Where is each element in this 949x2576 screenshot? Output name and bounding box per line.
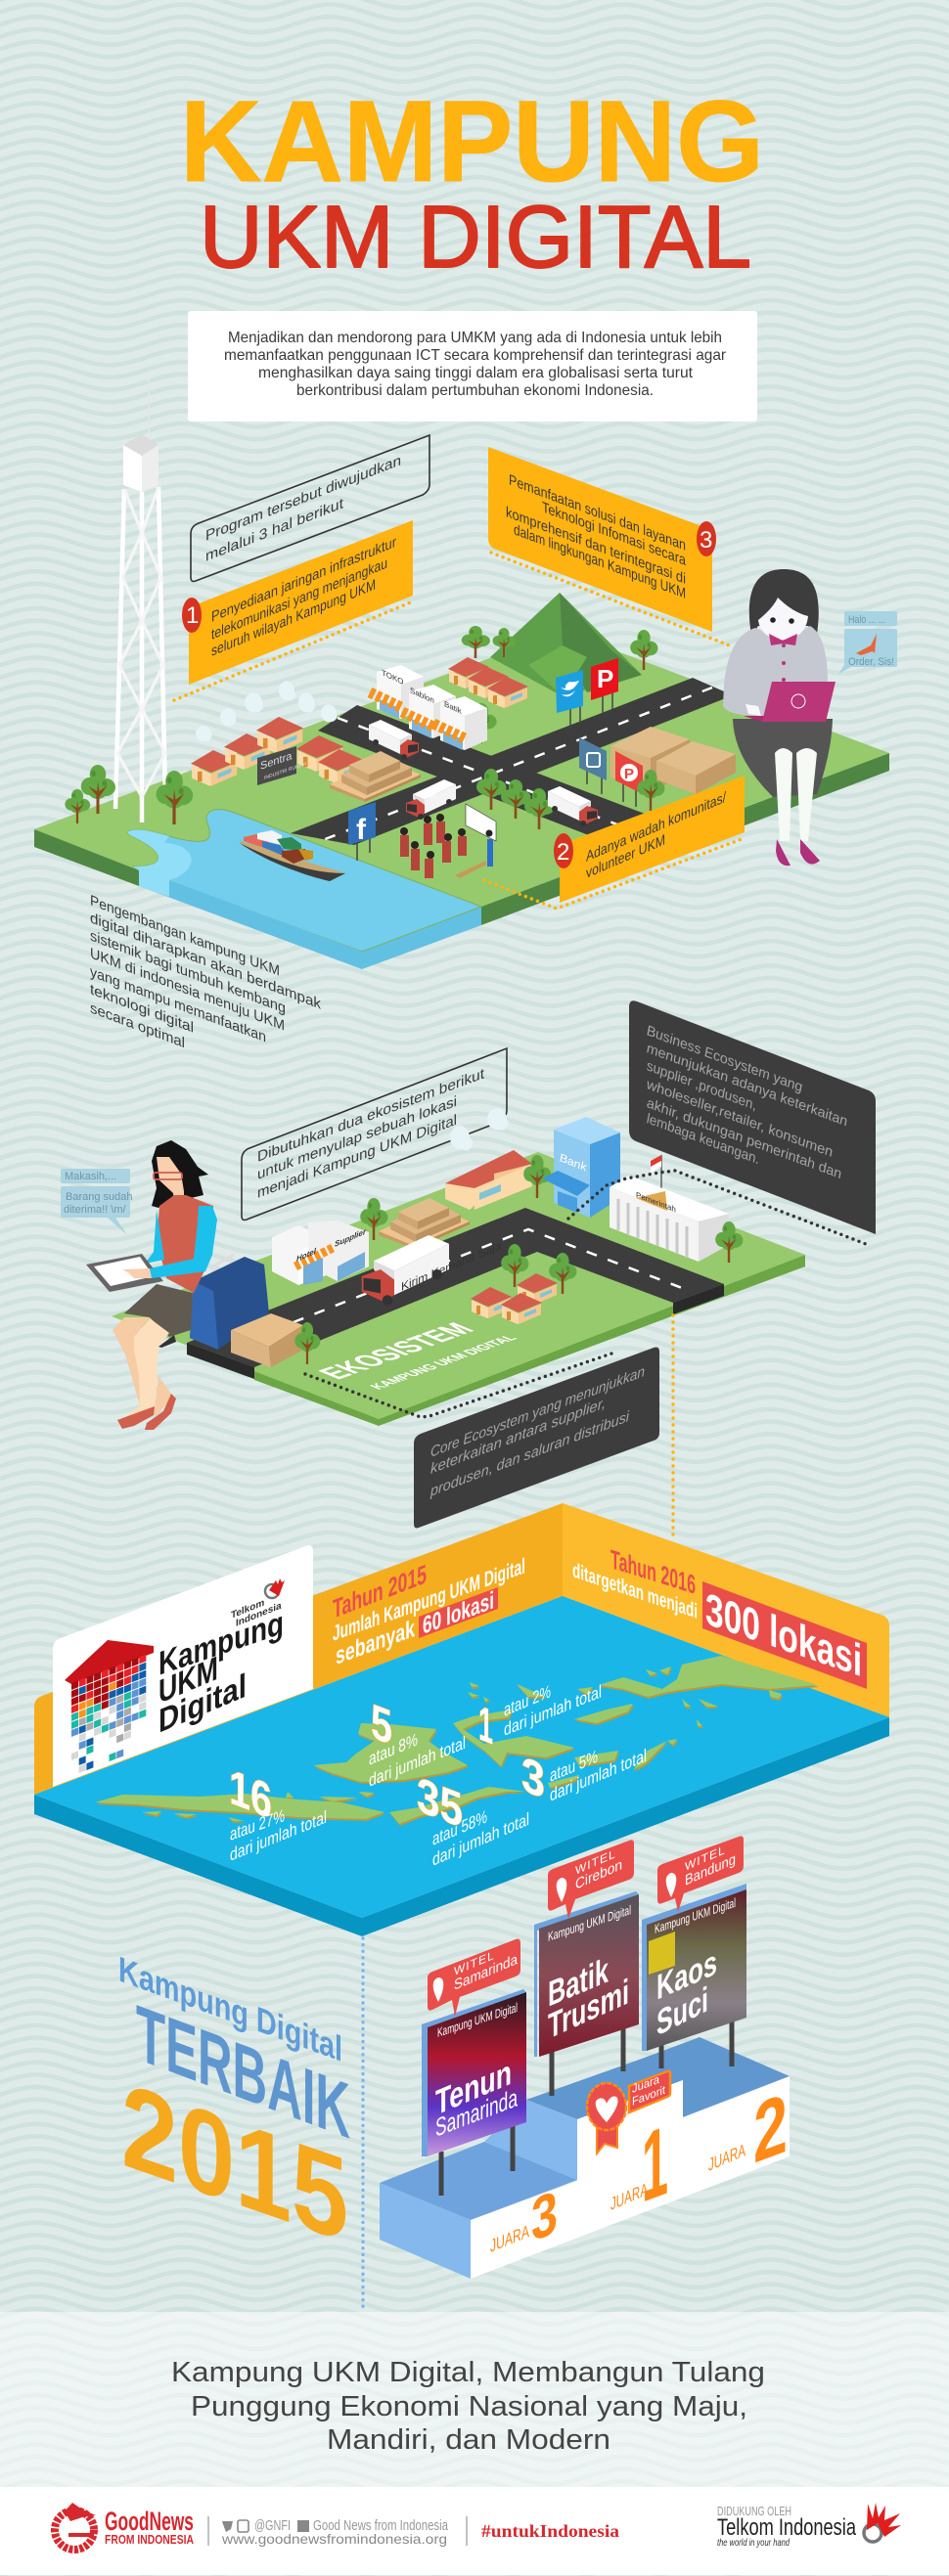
logo card: kampung ukm digital: UKM: [158, 1649, 218, 1711]
water bay: [128, 810, 481, 969]
heading: kampung digital terbaik 2015: [118, 1948, 350, 2268]
social media billboards: f: [356, 814, 367, 846]
outlined note: dibutuhkan: [242, 1048, 507, 1221]
L-shaped road: [187, 1208, 724, 1367]
core ecosystem panel: Core Ecosystem yang menunjukkan: [430, 1363, 645, 1461]
wholesaler and supplier shops: Supplier: [335, 1226, 367, 1249]
billboard: batik trusmi: Batik: [548, 1949, 609, 2015]
2015 statement: sebanyak: [336, 1615, 415, 1670]
2015 statement: Tahun 2015: [333, 1559, 427, 1624]
ecosystem trees and houses: [471, 1244, 576, 1324]
logo card: kampung ukm digital: Kampung: [158, 1604, 284, 1683]
2015 statement: 60 lokasi: [423, 1587, 494, 1640]
juara labels: 2: [753, 2075, 788, 2181]
billboard: tenun samarinda: Samarinda: [435, 2083, 518, 2143]
billboard: kaos suci: Kaos: [656, 1941, 717, 2008]
core ecosystem panel: [414, 1348, 659, 1528]
woman with laptop: [723, 569, 836, 866]
label 2: 2: [557, 839, 569, 866]
paragraph: pengembangan: Pengembangan kampung UKM: [90, 892, 280, 980]
paragraph: pengembangan: digital diharapkan akan berdampak: [90, 910, 321, 1013]
social links: Good News from Indonesia: [313, 2517, 448, 2534]
outlined note: dibutuhkan: untuk menyulap sebuah lokasi: [257, 1093, 457, 1183]
figure 3: 3: [521, 1746, 545, 1809]
2015 statement: [333, 1553, 525, 1670]
label 1: 1: [186, 602, 199, 629]
trees: [65, 626, 657, 829]
dotted divider: [361, 1938, 365, 2310]
label 1: Penyediaan jaringan infrastruktur: [211, 534, 396, 626]
label 3: Pemanfaatan solusi dan layanan: [509, 471, 686, 555]
pemerintah building with flag: [610, 1155, 743, 1263]
map base: [34, 1596, 889, 1936]
figure 5: atau 8%: [369, 1729, 418, 1769]
telkom logo small: [231, 1578, 285, 1629]
hashtag: #untukIndonesia: [481, 2521, 619, 2541]
outlined note: program: [191, 435, 429, 581]
figure 35: dari jumlah total: [432, 1808, 529, 1870]
footer: [0, 2487, 949, 2575]
big cardboard boxes: P: [624, 766, 634, 782]
2016 target: 300 lokasi: [705, 1583, 862, 1687]
core ecosystem panel: produsen, dan saluran distribusi: [429, 1408, 629, 1500]
juara favorit badge: [587, 2071, 670, 2154]
ekosistem label: EKOSISTEM: [310, 1319, 482, 1383]
juara favorit badge: Favorit: [632, 2083, 665, 2109]
billboard: kaos suci: Kampung UKM Digital: [655, 1895, 736, 1936]
title: KAMPUNG: [180, 77, 764, 206]
community meeting people: [400, 804, 496, 878]
speech bubbles: thanks: diterima!! \m/: [64, 1204, 127, 1216]
shops: Sablon: [410, 685, 434, 705]
witel pin: bandung: WITEL: [685, 1843, 726, 1874]
pallet crates: [330, 751, 421, 802]
map figures: [229, 1680, 647, 1870]
core ecosystem panel: keterkaitan antara supplier,: [430, 1395, 606, 1478]
mountain: [490, 593, 642, 696]
witel pin: bandung: Bandung: [685, 1851, 736, 1889]
paragraph: pengembangan: [90, 892, 321, 1051]
paragraph: pengembangan: teknologi digital: [90, 981, 194, 1037]
paragraph: pengembangan: secara optimal: [90, 999, 185, 1051]
speech bubbles: thanks: Barang sudah: [66, 1191, 133, 1203]
figure 16: 16: [229, 1758, 272, 1830]
outlined note: program: melalui 3 hal berikut: [205, 495, 344, 565]
container ship: [240, 830, 345, 881]
juara labels: JUARA: [708, 2140, 746, 2175]
shopping bag and parcel: [190, 1256, 320, 1367]
telkom indonesia support: DIDUKUNG OLEH: [717, 2504, 791, 2518]
outlined note: program: Program tersebut diwujudkan: [205, 452, 401, 545]
logo card: kampung ukm digital: Digital: [158, 1666, 247, 1741]
social links: [208, 2516, 467, 2547]
business ecosystem panel: menunjukkan adanya keterkaitan: [647, 1040, 847, 1131]
figure 5: [369, 1693, 466, 1791]
label 2: volunteer UKM: [586, 832, 665, 882]
pemerintah building with flag: Pemerintah: [636, 1190, 676, 1215]
business ecosystem panel: Business Ecosystem yang: [647, 1022, 802, 1096]
label 2: Adanya wadah komunitas/: [586, 789, 727, 866]
figure 5: 5: [371, 1693, 392, 1755]
witel pin: bandung: [657, 1836, 744, 1912]
figure 1: dari jumlah total: [504, 1681, 602, 1740]
billboard: tenun samarinda: Tenun: [435, 2052, 512, 2123]
billboard: kaos suci: [642, 1884, 746, 2068]
paragraph: pengembangan: sistemik bagi tumbuh kembang: [90, 927, 286, 1017]
2016 target: [572, 1544, 867, 1689]
figure 35: [417, 1766, 529, 1870]
billboard: batik trusmi: [534, 1891, 639, 2096]
figure 3: atau 5%: [550, 1746, 598, 1786]
shops: [370, 665, 487, 750]
juara labels: JUARA: [610, 2179, 648, 2214]
figure 35: atau 58%: [432, 1806, 487, 1849]
witel pin: samarinda: WITEL: [454, 1948, 495, 1978]
social links: @GNFI: [254, 2517, 291, 2534]
billboard: batik trusmi: Trusmi: [548, 1972, 629, 2048]
closing banner: [0, 2312, 949, 2487]
social media billboards: [348, 658, 636, 861]
wholesaler and supplier shops: [272, 1221, 369, 1285]
intro text box: memanfaatkan penggunaan ICT secara komprehensif dan terintegrasi agar: [224, 347, 727, 364]
road main: [291, 678, 733, 845]
woman with tablet: [86, 1140, 217, 1430]
winners podium: [380, 2037, 790, 2279]
figure 1: 1: [478, 1695, 493, 1754]
figure 1: atau 2%: [504, 1680, 551, 1720]
intro text box: berkontribusi dalam pertumbuhan ekonomi Indonesia.: [296, 382, 654, 399]
juara labels: 3: [531, 2177, 558, 2255]
intro text box: [188, 311, 757, 422]
witel pin: cirebon: [548, 1840, 634, 1919]
sentra sign: INDUSTRI RUMAH: [264, 761, 306, 781]
ecosystem platform: KAMPUNG UKM DIGITAL: [367, 1334, 521, 1392]
factory houses and smoke: [360, 1108, 551, 1249]
closing banner: Kampung UKM Digital, Membangun Tulang: [171, 2357, 765, 2388]
dotted connectors: [305, 1171, 866, 1540]
paragraph: pengembangan: UKM di indonesia menuju UKM: [90, 945, 285, 1035]
ecosystem truck: [362, 1235, 502, 1306]
heading: kampung digital terbaik 2015: TERBAIK: [136, 1987, 350, 2155]
social links: www.goodnewsfromindonesia.org: [221, 2531, 447, 2547]
speech bubbles: order: Halo ... ...: [848, 614, 885, 626]
billboard: batik trusmi: Kampung UKM Digital: [548, 1902, 631, 1944]
bank building: Bank: [560, 1150, 587, 1175]
sentra sign: Sentra: [260, 750, 293, 773]
juara labels: 1: [642, 2104, 668, 2223]
speech bubbles: order: Order, Sis!: [848, 656, 894, 668]
business ecosystem panel: akhir, dukungan pemerintah dan: [647, 1094, 841, 1182]
label 3: komprehensif dan terintegrasi di: [506, 504, 686, 588]
label 2: [484, 776, 745, 909]
label 3: 3: [700, 527, 712, 554]
business ecosystem panel: [629, 1000, 876, 1234]
map section walls: [34, 1503, 889, 1795]
witel pin: samarinda: [428, 1938, 520, 2017]
telkom indonesia support: Telkom Indonesia: [717, 2514, 856, 2541]
wholesaler and supplier shops: Hotel: [296, 1246, 317, 1264]
label 1: [174, 520, 413, 700]
title: [180, 77, 764, 287]
delivery trucks: [369, 720, 598, 826]
bank building: [542, 1117, 620, 1218]
label 3: [488, 447, 732, 646]
heading: kampung digital terbaik 2015: Kampung Digital: [118, 1948, 342, 2069]
goodnews logo: [55, 2503, 194, 2550]
road cross: [318, 705, 645, 839]
isometric village ground: [34, 631, 889, 969]
goodnews logo: FROM INDONESIA: [105, 2532, 194, 2547]
business ecosystem panel: wholeseller,retailer, konsumen: [647, 1076, 833, 1161]
paragraph: pengembangan: yang mampu memanfaatkan: [90, 963, 266, 1046]
outlined note: dibutuhkan: Dibutuhkan dua ekosistem berikut: [257, 1065, 485, 1166]
home industry houses with smoke: [191, 681, 363, 786]
2015 statement: Jumlah Kampung UKM Digital: [333, 1553, 525, 1646]
juara favorit badge: Juara: [632, 2072, 659, 2096]
telkom indonesia support: the world in your hand: [717, 2538, 790, 2549]
figure 16: [229, 1758, 327, 1865]
closing banner: Punggung Ekonomi Nasional yang Maju,: [191, 2391, 747, 2422]
heading: kampung digital terbaik 2015: 2015: [121, 2056, 348, 2268]
social media billboards: P: [597, 664, 613, 693]
label 1: telekomunikasi yang menjangkau: [211, 555, 387, 644]
billboard: tenun samarinda: [422, 1989, 526, 2196]
2016 target: ditargetkan menjadi: [572, 1558, 698, 1623]
big cardboard boxes: [610, 727, 736, 811]
figure 1: [478, 1680, 602, 1754]
billboard: kaos suci: Suci: [656, 1978, 708, 2044]
witel pin: samarinda: Samarinda: [454, 1951, 518, 1994]
witel pin: cirebon: Cirebon: [575, 1856, 622, 1893]
figure 16: dari jumlah total: [230, 1806, 327, 1865]
outlined note: dibutuhkan: menjadi Kampung UKM Digital: [257, 1112, 457, 1202]
mosaic house logo: [65, 1640, 154, 1776]
houses: [448, 657, 528, 708]
ecosystem platform: [112, 1152, 805, 1426]
witel pin: cirebon: WITEL: [575, 1846, 616, 1878]
label 3: Teknologi Infomasi secara: [542, 499, 686, 569]
juara labels: [490, 2075, 788, 2256]
communication tower: [115, 372, 165, 822]
label 3: dalam lingkungan Kampung UKM: [514, 521, 686, 602]
ecosystem truck: Kirim Kemana Saja: [401, 1238, 502, 1294]
islands: [95, 1656, 819, 1826]
intro text box: menghasilkan daya saing tinggi dalam era globalisasi serta turut: [258, 365, 694, 381]
2016 target: Tahun 2016: [610, 1544, 696, 1600]
intro text box: Menjadikan dan mendorong para UMKM yang ada di Indonesia untuk lebih: [228, 330, 722, 346]
figure 35: 35: [417, 1766, 463, 1839]
billboard: tenun samarinda: Kampung UKM Digital: [437, 2000, 518, 2040]
label 1: seluruh wilayah Kampung UKM: [211, 577, 376, 660]
business ecosystem panel: lembaga keuangan.: [647, 1110, 759, 1168]
closing banner: Mandiri, dan Modern: [327, 2424, 610, 2456]
telkom indonesia support: [717, 2503, 901, 2549]
business ecosystem panel: supplier ,produsen,: [647, 1057, 756, 1114]
goodnews logo: GoodNews: [105, 2507, 194, 2536]
title: UKM DIGITAL: [200, 189, 751, 287]
figure 16: atau 27%: [230, 1804, 285, 1844]
figure 5: dari jumlah total: [369, 1732, 466, 1791]
logo card: kampung ukm digital: [53, 1545, 313, 1787]
sentra sign: [257, 746, 306, 785]
shops: Batik: [444, 698, 463, 716]
juara labels: JUARA: [490, 2221, 529, 2256]
shops: TOKO: [382, 667, 404, 687]
telkom logo small: Indonesia: [236, 1601, 282, 1629]
speech bubbles: order: [838, 611, 897, 674]
speech bubbles: thanks: Makasih,...: [65, 1171, 116, 1182]
telkom logo small: Telkom: [231, 1598, 264, 1621]
speech bubbles: thanks: [61, 1169, 133, 1235]
figure 3: dari jumlah total: [550, 1745, 647, 1805]
figure 3: [521, 1745, 647, 1809]
